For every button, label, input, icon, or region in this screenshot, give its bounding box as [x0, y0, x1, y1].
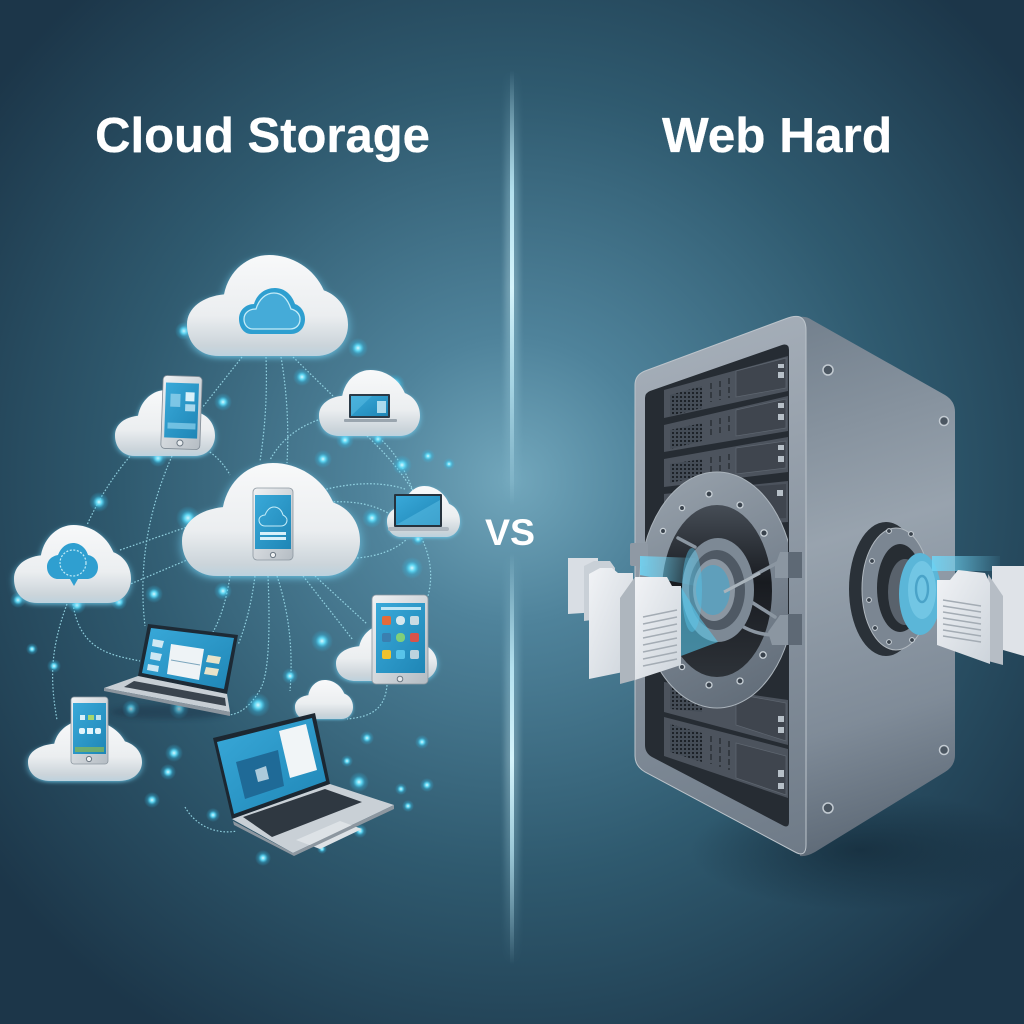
file front	[620, 577, 681, 684]
drive bay 1	[664, 356, 788, 418]
file rear	[992, 566, 1024, 656]
cloud with phone bottom left	[28, 697, 142, 781]
cloud with tilted phone	[115, 375, 215, 456]
glowing dots	[10, 322, 455, 866]
VS label: VS	[485, 511, 535, 553]
laptop: middle	[104, 624, 238, 719]
left data band	[640, 556, 696, 586]
left translucent hub overlay	[682, 548, 702, 632]
blue knob	[899, 553, 941, 635]
server safe	[630, 316, 1000, 856]
drive bay 4	[664, 481, 788, 530]
floor shadow	[690, 790, 1024, 910]
right dial	[849, 522, 941, 656]
center divider with VS	[485, 70, 535, 965]
icon: blue cloud bubble	[47, 543, 98, 586]
cloud with tablet	[336, 595, 437, 684]
vault hub	[682, 538, 760, 642]
left files	[568, 558, 681, 684]
file middle	[589, 568, 633, 679]
center cloud with phone	[182, 463, 360, 576]
laptop: front large	[213, 713, 394, 856]
device: laptop	[344, 394, 397, 422]
device: phone	[71, 697, 108, 764]
device: laptop	[388, 494, 449, 531]
file front	[937, 570, 990, 664]
vault door opening	[662, 505, 772, 677]
latch lower right	[768, 614, 802, 645]
dial bolts	[867, 529, 914, 644]
drive bay 2	[664, 396, 788, 452]
latch left	[630, 543, 648, 566]
latch arms	[678, 538, 777, 635]
title: Cloud Storage: Cloud Storage	[95, 109, 430, 163]
left cloud with speech icon	[14, 525, 131, 603]
hub arm tip	[724, 573, 760, 592]
drive bay 6	[664, 717, 788, 798]
device: tablet	[372, 595, 428, 684]
right cloud with laptop	[387, 486, 460, 537]
device: phone	[253, 488, 293, 560]
cloud storage network	[10, 255, 460, 866]
server front opening	[645, 345, 789, 826]
cloud with small laptop	[319, 370, 420, 436]
latch upper right	[775, 552, 802, 578]
device: phone	[161, 375, 202, 450]
file fold	[988, 574, 1003, 665]
cloud: small lower	[295, 680, 353, 719]
drive rows	[664, 356, 788, 798]
server front frame	[635, 316, 806, 854]
file rear 1	[568, 558, 598, 614]
right files	[937, 566, 1024, 665]
file rear 2	[584, 561, 615, 621]
server side panel	[800, 317, 955, 856]
drive bay 3	[664, 437, 788, 487]
drive bay 5	[664, 682, 788, 745]
screws on side panel	[823, 365, 948, 813]
ring bolts	[660, 491, 767, 688]
connection lines	[53, 357, 431, 832]
vault door ring	[639, 472, 795, 708]
top cloud with cloud icon	[187, 255, 348, 356]
lower blue glow panel	[681, 587, 718, 656]
right data band	[932, 556, 1000, 571]
title: Web Hard: Web Hard	[662, 108, 892, 163]
icon: blue cloud	[239, 288, 305, 334]
